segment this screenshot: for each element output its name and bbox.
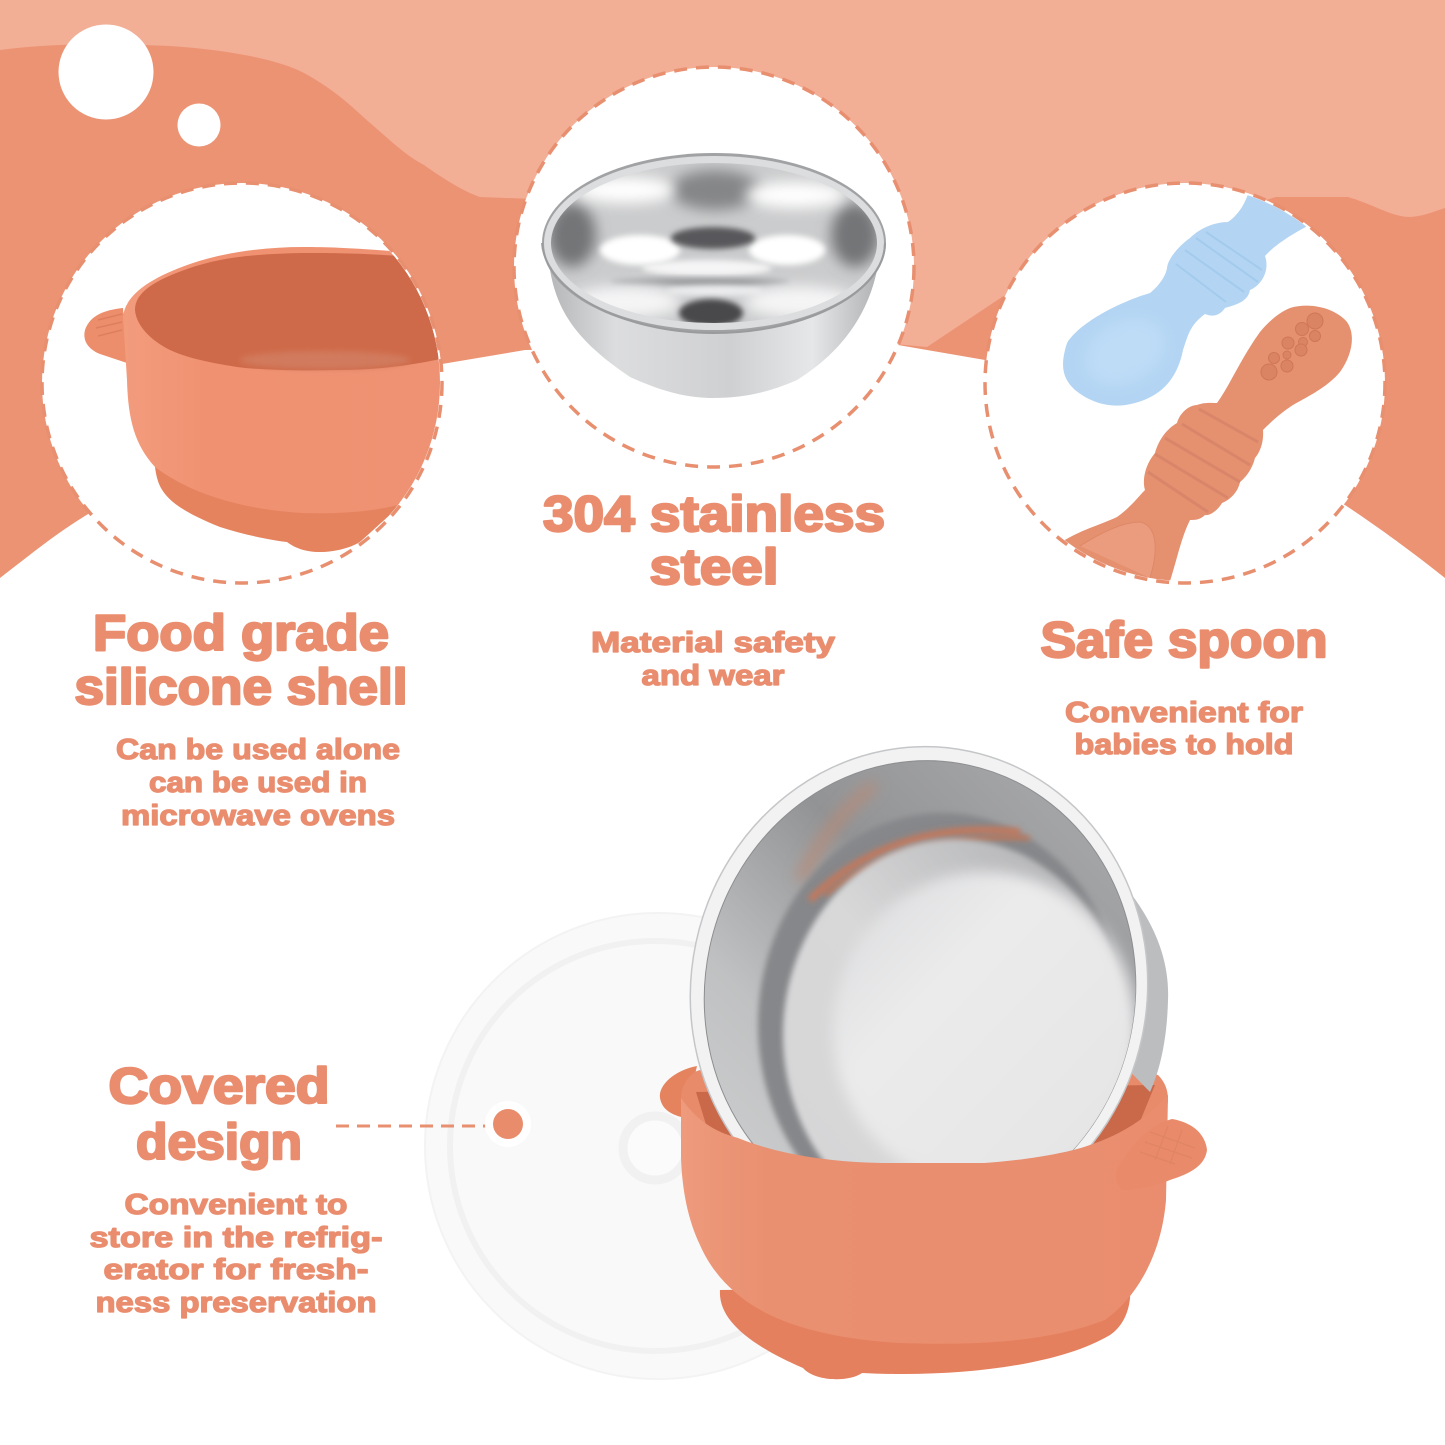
text: steel description — [591, 627, 835, 692]
panel: silicone shell — [42, 183, 450, 583]
text: silicone description: can be used in — [149, 767, 367, 799]
heading: covered design: design — [136, 1114, 302, 1170]
bowl interior — [696, 1085, 1155, 1170]
heading: safe spoon: Safe spoon — [1040, 612, 1328, 668]
text: spoon description: Convenient for — [1065, 697, 1303, 729]
panel: safe spoon — [985, 183, 1385, 590]
decorative bubble large — [58, 24, 154, 120]
text: covered description: store in the refrig- — [90, 1222, 382, 1254]
decorative bubble small — [178, 104, 220, 146]
callout: covered design pointer — [336, 1101, 531, 1147]
bowl body — [681, 1095, 1168, 1344]
heading: food grade: Food grade — [93, 605, 389, 661]
heading: covered design — [108, 1058, 330, 1170]
heading: 304 stainless steel: steel — [650, 539, 778, 595]
text: covered description: ness preservation — [96, 1287, 376, 1319]
heading: covered design: Covered — [108, 1058, 330, 1114]
text: covered description: erator for fresh- — [104, 1254, 368, 1286]
heading: 304 stainless steel: 304 stainless — [543, 486, 885, 542]
text: steel description: and wear — [642, 660, 784, 692]
icon: blue and orange spoons — [1060, 188, 1352, 590]
text: spoon description — [1065, 697, 1303, 761]
steel outer crescent — [1060, 880, 1168, 1092]
text: silicone description — [116, 734, 400, 832]
product: bowl with steel insert — [645, 704, 1207, 1379]
background: darker wave — [0, 44, 1445, 580]
text: steel description: Material safety — [591, 627, 835, 659]
background: white lower area — [0, 345, 1445, 1445]
text: silicone description: microwave ovens — [121, 800, 395, 832]
text: silicone description: Can be used alone — [116, 734, 400, 766]
heading: food grade: silicone shell — [74, 659, 408, 715]
lid — [425, 913, 891, 1379]
left handle — [660, 1066, 697, 1118]
panel: stainless steel — [514, 67, 914, 467]
steel insert — [690, 746, 1148, 1163]
heading: food grade — [74, 605, 408, 715]
background: light peach band — [0, 0, 1445, 580]
text: spoon description: babies to hold — [1074, 729, 1294, 761]
bowl base — [720, 1285, 1130, 1379]
icon: silicone bowl — [84, 247, 450, 552]
heading: 304 stainless steel — [543, 486, 885, 595]
right handle — [1116, 1119, 1207, 1190]
bowl back rim — [681, 1070, 1168, 1180]
text: covered description: Convenient to — [124, 1189, 348, 1221]
icon: stainless bowl — [542, 153, 886, 398]
text: covered description — [90, 1189, 382, 1319]
